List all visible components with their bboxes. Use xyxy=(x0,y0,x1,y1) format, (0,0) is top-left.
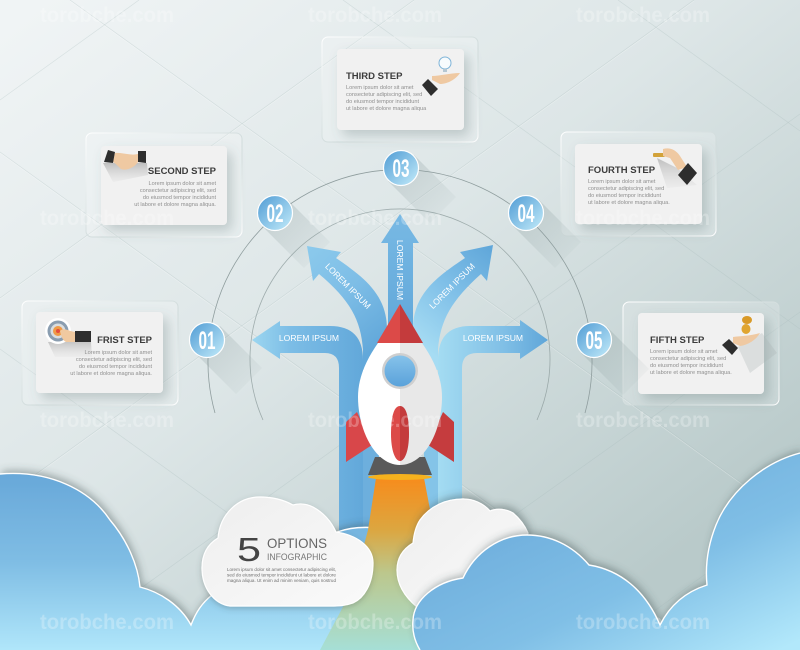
arrow: upper right xyxy=(413,245,493,370)
cloud text block: Lorem ipsum dolor sit amet consectetur adipiscing elit, xyxy=(227,567,336,573)
arrow: up xyxy=(381,214,419,345)
white cloud shape xyxy=(202,497,373,606)
text block 5: do eiusmod tempor incididunt xyxy=(650,363,724,369)
watermarks: torobche.com xyxy=(40,409,174,432)
arrow: upper left: LOREM IPSUM xyxy=(323,261,373,311)
text block 1: Lorem ipsum dolor sit amet xyxy=(85,350,152,356)
text block 5: consectetur adipiscing elit, sed xyxy=(650,356,726,362)
right fin xyxy=(428,412,454,462)
arrow: upper left xyxy=(307,246,387,370)
text block 3: do eiusmod tempor incididunt xyxy=(346,99,420,105)
text block 3: Lorem ipsum dolor sit amet xyxy=(346,85,414,91)
card 2 xyxy=(101,146,227,225)
badge 04 xyxy=(508,196,581,268)
concentric orbit arcs xyxy=(208,170,592,420)
text block 4 xyxy=(588,179,670,206)
text block 3 xyxy=(346,85,427,112)
text block 2 xyxy=(134,181,216,208)
heading 1: FRIST STEP xyxy=(97,335,153,346)
text block 5: ut labore et dolore magna aliqua. xyxy=(650,370,732,376)
watermarks: torobche.com xyxy=(576,409,710,432)
arrow: right xyxy=(424,320,548,535)
watermarks: torobche.com xyxy=(308,611,442,634)
text block 3: ut labore et dolore magna aliqua xyxy=(346,106,427,112)
title: options: OPTIONS xyxy=(267,535,327,551)
glass frame 4 xyxy=(561,132,716,236)
text block 5: Lorem ipsum dolor sit amet xyxy=(650,349,718,355)
card 3 xyxy=(337,49,464,130)
heading 3: THIRD STEP xyxy=(346,71,403,82)
card 5 xyxy=(638,313,764,394)
icon: handshake xyxy=(103,150,148,182)
watermarks: torobche.com xyxy=(308,207,442,230)
watermarks: torobche.com xyxy=(576,611,710,634)
heading 4: FOURTH STEP xyxy=(588,165,656,176)
card 4 xyxy=(575,144,702,224)
watermarks: torobche.com xyxy=(40,207,174,230)
badge 03: 03 xyxy=(392,155,410,183)
icon: hand holding coin xyxy=(653,148,697,188)
panel: fourth step xyxy=(561,132,716,236)
text block 3: consectetur adipiscing elit, sed xyxy=(346,92,422,98)
badge 03 xyxy=(384,150,456,223)
rocket flame xyxy=(320,478,470,650)
text block 2: ut labore et dolore magna aliqua. xyxy=(134,202,216,208)
text block 4: do eiusmod tempor incididunt xyxy=(588,193,662,199)
cloud text block xyxy=(227,567,336,584)
badge 05: 05 xyxy=(586,327,603,355)
rocket nose xyxy=(377,304,423,343)
text block 1: ut labore et dolore magna aliqua. xyxy=(70,371,152,377)
text block 1: do eiusmod tempor incididunt xyxy=(79,364,152,370)
text block 1 xyxy=(70,350,152,377)
rocket door xyxy=(391,406,409,461)
icon: hand and target xyxy=(45,318,92,357)
watermarks: torobche.com xyxy=(308,409,442,432)
title cloud xyxy=(202,497,373,606)
watermarks: torobche.com xyxy=(40,4,174,27)
panel: third step xyxy=(322,37,478,142)
panel: second step xyxy=(86,133,242,237)
right white cloud xyxy=(397,499,528,620)
glass frame 3 xyxy=(322,37,478,142)
nozzle ring xyxy=(368,474,432,480)
left blue cloud xyxy=(0,473,415,650)
watermarks: torobche.com xyxy=(308,4,442,27)
text block 1: consectetur adipiscing elit, sed xyxy=(76,357,152,363)
arrow: left: LOREM IPSUM xyxy=(279,333,339,343)
glass frame 1 xyxy=(22,301,178,405)
text block 5 xyxy=(650,349,732,376)
subtitle: infographic: INFOGRAPHIC xyxy=(267,552,327,563)
left fin xyxy=(346,412,372,462)
heading 5: FIFTH STEP xyxy=(650,335,705,346)
big number 5: 5 xyxy=(237,531,261,568)
arrow: right: LOREM IPSUM xyxy=(463,333,523,343)
glass frame 5 xyxy=(623,302,779,405)
panel: first step xyxy=(22,301,178,405)
text block 4: Lorem ipsum dolor sit amet xyxy=(588,179,656,185)
badge 05 xyxy=(576,322,649,395)
rocket nozzle xyxy=(368,457,432,475)
panel: fifth step xyxy=(623,302,779,405)
rocket body xyxy=(358,343,442,465)
badge 01: 01 xyxy=(198,327,216,355)
text block 2: do eiusmod tempor incididunt xyxy=(143,195,216,201)
icon: hand with coins xyxy=(722,316,777,373)
watermarks: torobche.com xyxy=(576,207,710,230)
heading 2: SECOND STEP xyxy=(148,166,217,177)
badge 02: 02 xyxy=(266,200,284,228)
rocket window xyxy=(382,353,418,389)
text block 4: ut labore et dolore magna aliqua. xyxy=(588,200,670,206)
arrow: upper right: LOREM IPSUM xyxy=(427,261,477,311)
card 1 xyxy=(36,312,163,393)
cloud text block: magna aliqua. Ut enim ad minim veniam, quis nostrud xyxy=(227,578,336,584)
badge 04: 04 xyxy=(518,200,535,228)
glass frame 2 xyxy=(86,133,242,237)
text block 2: consectetur adipiscing elit, sed xyxy=(140,188,216,194)
arrow: up: LOREM IPSUM xyxy=(395,240,405,300)
right blue cloud xyxy=(413,453,800,650)
watermarks: torobche.com xyxy=(576,4,710,27)
text block 2: Lorem ipsum dolor sit amet xyxy=(149,181,216,187)
icon: hand with light bulb xyxy=(422,57,460,96)
rocket xyxy=(346,304,454,480)
text block 4: consectetur adipiscing elit, sed xyxy=(588,186,664,192)
badge 02 xyxy=(258,196,330,268)
cloud text block: sed do eiusmod tempor incididunt ut labore et dolore xyxy=(227,572,336,578)
arrow: left xyxy=(252,321,379,535)
watermarks: torobche.com xyxy=(40,611,174,634)
badge 01 xyxy=(190,322,262,394)
